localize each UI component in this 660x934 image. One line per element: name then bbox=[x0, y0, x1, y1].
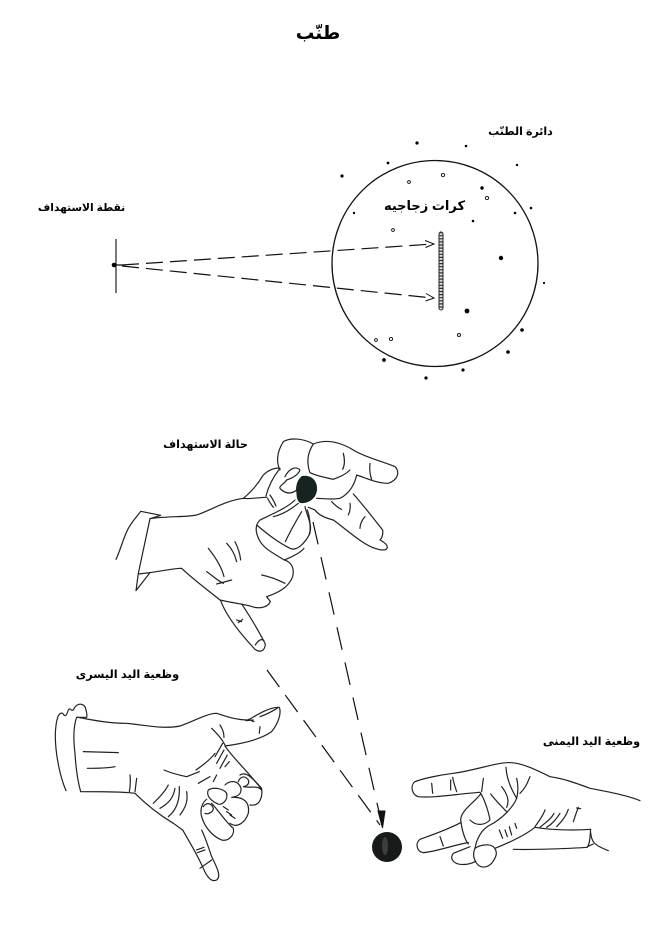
arrow: lower aim line bbox=[122, 266, 434, 301]
arrow: dashed line from held marble to target bbox=[313, 522, 385, 828]
icon: held marble bbox=[296, 476, 317, 503]
title: طنّب bbox=[296, 22, 340, 43]
circle boundary bbox=[332, 160, 538, 366]
icon: target marble bbox=[372, 832, 402, 862]
row of marbles bbox=[439, 232, 443, 310]
label: left hand position: وظعية اليد اليسرى bbox=[76, 669, 179, 681]
label: aiming point: نقطة الاستهداف bbox=[38, 202, 125, 214]
icon: left hand bbox=[55, 704, 280, 881]
label: marbles: كرات زجاجيه bbox=[384, 198, 465, 213]
arrow: dashed line from index finger to target bbox=[267, 670, 380, 825]
open marbles bbox=[375, 173, 489, 341]
label: aiming position: حالة الاستهداف bbox=[163, 439, 248, 451]
label: tanab circle: دائرة الطنّب bbox=[488, 126, 553, 138]
icon: aiming hand bbox=[116, 439, 398, 651]
filled marbles bbox=[340, 141, 545, 380]
icon: right hand bbox=[412, 763, 640, 867]
arrow: upper aim line bbox=[122, 240, 434, 265]
aiming point bbox=[112, 239, 122, 293]
diagram: tanab circle with marbles bbox=[332, 141, 545, 380]
label: right hand position: وظعية اليد اليمنى bbox=[543, 736, 640, 748]
